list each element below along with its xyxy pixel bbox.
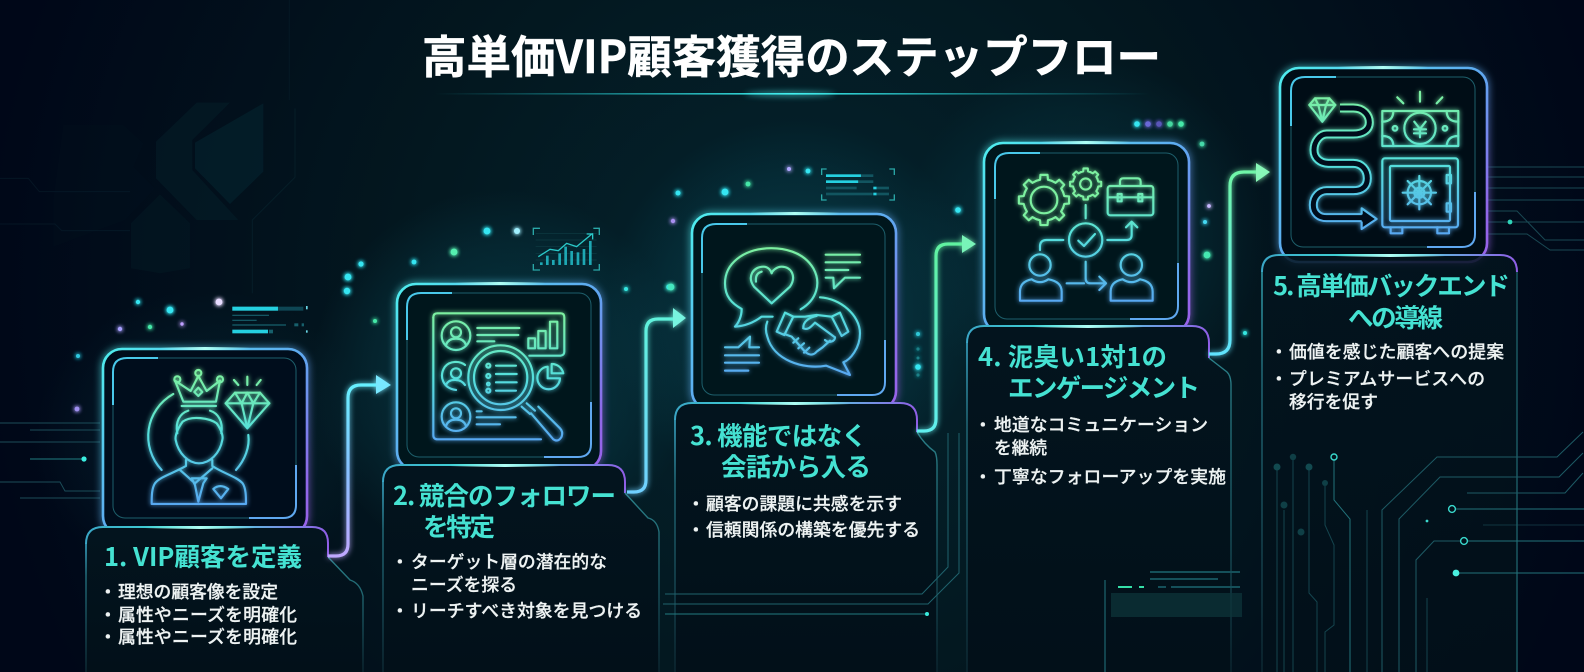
step 3 card bbox=[675, 212, 937, 672]
step 5 bullets: 移行を促す bbox=[1289, 388, 1378, 414]
step 3 text panel bbox=[675, 402, 937, 672]
arrow: step 2 to step 3 bbox=[627, 308, 686, 492]
step 1 bullets: ・ bbox=[99, 578, 117, 604]
step 1 bullets: 理想の顧客像を設定 bbox=[118, 578, 278, 604]
title underline bbox=[435, 91, 1150, 97]
mini chart: rising bar graph near step 2 bbox=[533, 228, 599, 270]
step 4 heading: 4. 泥臭い1対1の bbox=[978, 337, 1167, 374]
step 1 bullets: 属性やニーズを明確化 bbox=[118, 623, 297, 649]
step 2 bullets: ・ bbox=[391, 597, 409, 623]
arrow: step 1 to step 2 bbox=[328, 375, 391, 556]
step 5 text panel: への導線 bbox=[1348, 298, 1443, 335]
step 3 text panel: 会話から入る bbox=[721, 447, 871, 484]
title: 高単価VIP顧客獲得のステップフロー bbox=[422, 21, 1161, 86]
step 3 heading: 3. 機能ではなく bbox=[690, 416, 867, 453]
step 1 bullets: ・ bbox=[99, 623, 117, 649]
step 4 bullets: を継続 bbox=[994, 434, 1047, 460]
step 5 bullets bbox=[1270, 338, 1504, 414]
step 1 text panel bbox=[86, 526, 363, 672]
icon: competitor profile analysis with magnifier bbox=[433, 313, 564, 441]
step 3 bullets: 顧客の課題に共感を示す bbox=[706, 490, 902, 516]
icon: speech bubbles with heart and handshake bbox=[725, 248, 860, 375]
step 4 bullets bbox=[974, 411, 1226, 489]
arrow: step 4 to step 5 bbox=[1209, 163, 1270, 354]
step 2 icon frame bbox=[397, 282, 601, 470]
step 4 bullets: 丁寧なフォローアップを実施 bbox=[994, 463, 1226, 489]
step 4 text panel bbox=[967, 325, 1242, 672]
step 5 heading: 5. 高単価バックエンド bbox=[1273, 266, 1510, 303]
step 5 bullets: プレミアムサービスへの bbox=[1289, 365, 1485, 391]
step 5 bullets: ・ bbox=[1270, 365, 1288, 391]
step 5 card bbox=[1262, 66, 1517, 672]
icon: VIP person with crown and diamond bbox=[148, 370, 269, 504]
step 4 decorative data strip bbox=[1105, 572, 1242, 672]
step 2 text panel bbox=[383, 464, 659, 672]
step 5 bullets: ・ bbox=[1270, 338, 1288, 364]
step 1 card bbox=[86, 347, 363, 672]
mini chart: horizontal bars near step 3 bbox=[822, 169, 894, 200]
step 4 bullets: 地道なコミュニケーション bbox=[994, 411, 1208, 437]
background hexagon pattern bbox=[0, 0, 295, 293]
step 1 bullets: ・ bbox=[99, 601, 117, 627]
step 2 card bbox=[383, 282, 659, 672]
icon: path from diamond to yen note and safe bbox=[1309, 92, 1458, 233]
step 4 icon frame bbox=[984, 141, 1189, 333]
step 1 icon frame bbox=[103, 347, 307, 535]
step 3 bullets: ・ bbox=[687, 490, 705, 516]
step 2 bullets bbox=[391, 548, 642, 623]
glowing dots bbox=[75, 121, 1247, 411]
step 4 bullets: ・ bbox=[974, 463, 992, 489]
step 3 bullets bbox=[687, 490, 920, 542]
step 5 bullets: 価値を感じた顧客への提案 bbox=[1289, 338, 1504, 364]
step 5 icon frame bbox=[1280, 66, 1487, 262]
step 3 bullets: ・ bbox=[687, 516, 705, 542]
step 2 bullets: リーチすべき対象を見つける bbox=[411, 597, 642, 623]
background circuit lines: right bottom bbox=[1274, 432, 1584, 672]
background circuit lines: lower center bbox=[663, 433, 959, 616]
step 4 text panel: エンゲージメント bbox=[1008, 368, 1200, 405]
step 2 text panel: を特定 bbox=[423, 507, 495, 544]
step 4 bullets: ・ bbox=[974, 411, 992, 437]
step 1 bullets bbox=[99, 578, 297, 649]
background circuit lines: right top bbox=[1488, 167, 1584, 250]
step 2 bullets: ニーズを探る bbox=[411, 571, 517, 597]
step 2 bullets: ・ bbox=[391, 548, 409, 574]
step 2 bullets: ターゲット層の潜在的な bbox=[411, 548, 607, 574]
step 4 card bbox=[967, 141, 1242, 672]
step 2 heading: 2. 競合のフォロワー bbox=[393, 476, 616, 513]
icon: gears, briefcase and one-to-one people bbox=[1019, 168, 1153, 301]
step 3 bullets: 信頼関係の構築を優先する bbox=[706, 516, 920, 542]
step 1 bullets: 属性やニーズを明確化 bbox=[118, 601, 297, 627]
mini chart: status bars near step 1 bbox=[232, 306, 308, 333]
step 1 heading: 1. VIP顧客を定義 bbox=[104, 537, 302, 574]
step 3 icon frame bbox=[692, 212, 896, 410]
arrow: step 3 to step 4 bbox=[917, 235, 976, 431]
background circuit lines: left bbox=[0, 423, 100, 498]
step 5 text panel bbox=[1262, 254, 1517, 672]
